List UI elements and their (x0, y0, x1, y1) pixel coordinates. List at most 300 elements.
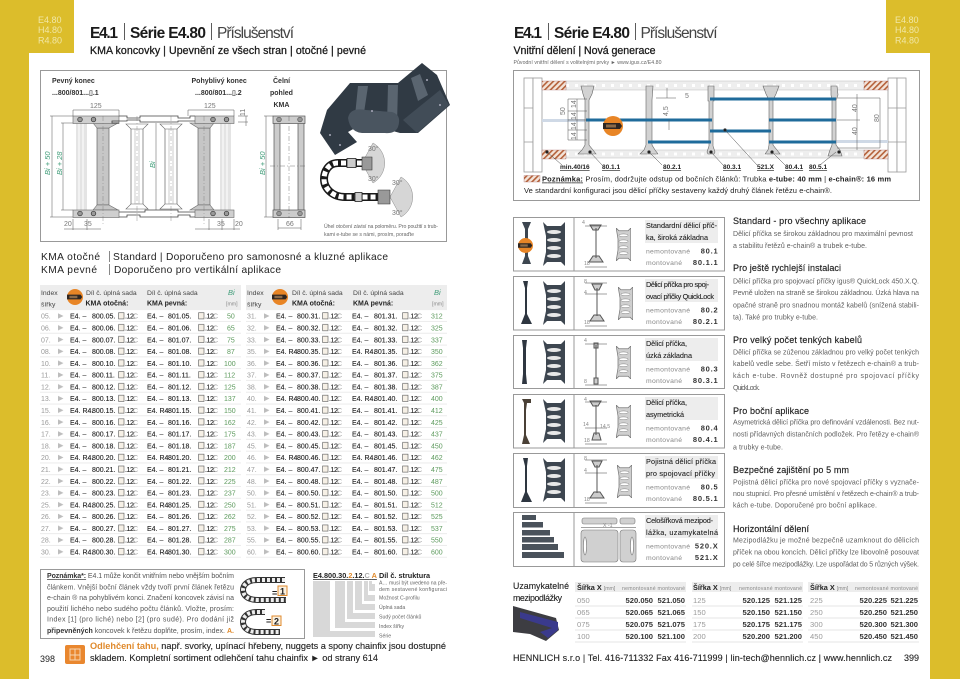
table: shelves 1: 520.100 (626, 632, 653, 641)
right table rows: E4. – (352, 443, 368, 450)
left table rows: C (213, 432, 218, 439)
left table rows: .12. (205, 420, 215, 427)
heading: KMA types: Standard | Doporučeno pro samonosné a kluzné aplikace (113, 252, 388, 263)
right table rows: C (417, 502, 422, 509)
left table rows: 262 (224, 514, 236, 521)
right table header: KMA pevná: (353, 300, 393, 308)
right table rows: E4. – (352, 526, 368, 533)
left table rows: .12. (125, 502, 135, 509)
right table rows: E4. – (352, 491, 368, 498)
left table rows: 175 (224, 432, 236, 439)
table: shelves 2 (692, 582, 803, 642)
right table rows: E4. – (352, 479, 368, 486)
right table rows: .12. (409, 455, 419, 462)
right table rows: .12. (329, 491, 339, 498)
right table rows: 801.40. (374, 396, 397, 403)
panel: 80.3 narrow base separator: 8 (584, 379, 587, 385)
left table rows: .12. (125, 514, 135, 521)
right table rows: 801.60. (374, 550, 397, 556)
left tab series labels: R4.80 (38, 36, 62, 46)
right table rows: C (337, 432, 342, 439)
panel: 80.2 QuickLock separator: Dělicí příčka pro spoj- (646, 280, 710, 289)
table: shelves 2: 520.200 (743, 632, 770, 641)
left table rows: 08. (41, 349, 51, 356)
diagram note (524, 174, 891, 195)
left table rows: 801.23. (168, 491, 191, 498)
right table rows: .12. (329, 337, 339, 344)
left table rows: 187 (224, 443, 236, 450)
right table rows: C (417, 526, 422, 533)
left table rows: 801.08. (168, 349, 191, 356)
left table rows: C (133, 373, 138, 380)
page number right: 399 (904, 653, 919, 663)
right table header: [mm] (432, 302, 444, 308)
left table rows: E4. – (70, 538, 86, 545)
left table rows: .12. (205, 373, 215, 380)
green width labels: Bi (148, 161, 157, 168)
left table rows: E4. – (70, 467, 86, 474)
left table rows: C (133, 349, 138, 356)
panel: 80.4 asymmetric separator: 80.4 (701, 424, 719, 432)
left table header: [mm] (226, 302, 238, 308)
end labels (52, 76, 293, 109)
right table rows: E4. – (276, 443, 292, 450)
left table rows: E4. – (70, 337, 86, 344)
drawing: rotation diagram: 30° (392, 179, 403, 187)
right table rows: 36. (247, 361, 257, 368)
panel: 80.5 locking separator: 80.5.1 (693, 494, 718, 503)
drawing: rotation diagram: 30° (392, 209, 403, 217)
panel: 80.4 asymmetric separator: 14,5 (600, 424, 610, 430)
part number labels: 80.5.1 (809, 164, 827, 171)
part number labels: 80.1.1 (602, 164, 620, 171)
right table rows: 801.50. (374, 491, 397, 498)
left table rows: 65 (227, 326, 235, 332)
right table header: Index (247, 290, 264, 297)
left tab series labels (38, 15, 62, 46)
left table rows: E4. – (70, 373, 86, 380)
panel: 80.5 locking separator: pro spojovací příčky (646, 469, 715, 478)
left table rows: 801.28. (168, 538, 191, 545)
right table rows: E4. – (352, 384, 368, 391)
dimension values: 125 (204, 103, 216, 110)
right table rows: 525 (431, 514, 443, 521)
right table rows: C (337, 467, 342, 474)
left table rows: 200 (224, 455, 236, 462)
dimension values: 14 (571, 132, 578, 140)
panel: 80.1 standard separator: Standardní dělicí příč- (646, 221, 718, 230)
right table header: šířky (247, 302, 262, 308)
structure labels: Možnost C-profilu (379, 596, 420, 602)
left table rows: .12. (125, 455, 135, 462)
right table rows: E4. – (276, 538, 292, 545)
right table rows: 800.41. (297, 408, 320, 415)
right table rows: C (337, 349, 342, 356)
right table rows: 537 (431, 526, 443, 533)
left table rows: E4. – (147, 538, 163, 545)
photo: shelf (513, 606, 559, 641)
right tab series labels: E4.80 (895, 15, 919, 25)
right table rows: 801.32. (374, 326, 397, 332)
dimension values: 35 (84, 221, 92, 228)
note text: Poznámka*: E4.1 může končit vnitřním nebo vnějším bočním (47, 572, 234, 580)
right table rows: 801.35. (374, 349, 397, 356)
right table rows: 801.38. (374, 384, 397, 391)
right table rows: .12. (409, 432, 419, 439)
dimension values: 50 (560, 107, 567, 115)
right table rows: E4. – (352, 373, 368, 380)
left table rows: E4. – (147, 396, 163, 403)
text block: faster installation: ta). Také pro trubky e-tube. (733, 314, 818, 322)
left table rows: .12. (205, 479, 215, 486)
right table header (246, 285, 447, 310)
panel: 80.2 QuickLock separator: montované (646, 319, 682, 326)
panel: 80.3 narrow base separator: 4 (584, 338, 587, 344)
right table rows: E4. – (276, 361, 292, 368)
right table rows: 312 (431, 314, 443, 321)
right table rows: .12. (409, 326, 419, 332)
table: shelves 2: 520.125 (743, 596, 771, 605)
structure labels: Série (379, 634, 391, 640)
heading: KMA types (41, 251, 388, 276)
left table rows: .12. (205, 538, 215, 545)
right table rows: C (337, 491, 342, 498)
left table rows: C (213, 337, 218, 344)
left table rows: 15. (41, 408, 51, 415)
right table rows: 31. (247, 314, 257, 321)
left table rows: .12. (125, 396, 135, 403)
right table rows: 55. (247, 538, 257, 545)
dimension values: 40 (852, 127, 859, 135)
table: shelves 1: 520.050 (626, 596, 653, 605)
right table rows: .12. (409, 502, 419, 509)
panel: note about end links (40, 570, 304, 638)
right table rows: 800.33. (297, 337, 320, 344)
right page title: E4.1 (514, 25, 542, 42)
right table rows: C (337, 455, 342, 462)
text block: faster installation: Pevně uložen na straně se širokou základnou. Úzká hlava na (733, 288, 919, 297)
left table rows: E4. – (70, 479, 86, 486)
left table rows: C (213, 502, 218, 509)
left table rows: C (213, 384, 218, 391)
left table rows: 23. (41, 491, 51, 498)
right table rows: 801.45. (374, 443, 397, 450)
table: shelves 3: 225 (810, 596, 823, 605)
note text: e-chain ® na pohyblivém konci. Značení koncovek závisí na (47, 594, 234, 602)
table: shelves 3: 521.250 (891, 608, 918, 617)
table: shelves 2: 200 (693, 632, 706, 641)
left table rows: .12. (125, 491, 135, 498)
left table rows: .12. (205, 526, 215, 533)
left table rows: E4. – (147, 384, 163, 391)
left table rows: 11. (41, 373, 50, 380)
photo: chain with KMA end (320, 63, 450, 155)
right table rows: .12. (409, 514, 419, 521)
left table rows: .12. (125, 314, 135, 321)
right table rows: .12. (329, 455, 339, 462)
right table rows: .12. (329, 443, 339, 450)
left table rows: E4. – (70, 420, 86, 427)
right tab series labels (895, 15, 919, 46)
structure bars (313, 581, 375, 637)
rotation caption: kami e-tube se s námi, prosím, poraďte (324, 232, 414, 238)
left table rows: C (213, 538, 218, 545)
left table rows: 300 (224, 550, 236, 556)
panel: 520.X interlocking shelf: montované (646, 555, 682, 562)
table: left part numbers (40, 285, 241, 558)
right table rows: 800.42. (297, 420, 320, 427)
note text: připevněných koncovek k řetězu doplňte, prosím, index. A. (47, 628, 234, 635)
left tab series labels: H4.80 (38, 25, 62, 35)
left table rows: .12. (205, 514, 215, 521)
right page title (514, 23, 718, 42)
left table rows: 801.05. (168, 314, 191, 321)
table: shelves 3: 520.450 (860, 632, 887, 641)
right table rows: E4. – (352, 337, 368, 344)
left table rows: 800.05. (92, 314, 115, 321)
panel: 520.X interlocking shelf: Celošířková mezipod- (646, 516, 714, 525)
end brackets (524, 78, 906, 172)
panel: 80.1 standard separator: 4 (582, 220, 585, 226)
right table rows: 33. (247, 337, 257, 344)
left table rows: E4. R4. (70, 455, 93, 462)
left table rows: 801.16. (168, 420, 191, 427)
text block: safe locking: Pojistná dělicí příčka pro nové spojovací příčky s vyznače- (733, 480, 920, 486)
note text: použití lichého nebo sudého počtu článků. Vložte, prosím: (47, 605, 234, 613)
right table rows: E4. – (352, 314, 368, 321)
table: shelves 2: 125 (693, 596, 706, 605)
right table rows: 46. (247, 455, 257, 462)
panel: 80.5 locking separator: 8 (584, 456, 587, 462)
right table rows: 41. (247, 408, 257, 415)
left table rows: 801.26. (168, 514, 191, 521)
left yellow tab (0, 0, 74, 679)
right table rows: .12. (329, 550, 339, 556)
left table rows: .12. (125, 420, 135, 427)
panel: 80.4 asymmetric separator: 80.4.1 (693, 435, 718, 444)
right table rows: 800.60. (297, 550, 320, 556)
table: shelves 2: 521.150 (775, 608, 802, 617)
hatched clearance zones (542, 81, 888, 159)
light tube lines (542, 119, 888, 143)
left table rows: 22. (41, 479, 51, 486)
left table rows: 801.11. (168, 373, 191, 380)
right table rows: E4. – (352, 550, 368, 556)
panel: 520.X interlocking shelf: lážka, uzamykatelná (646, 528, 719, 537)
left table header: Díl č. úplná sada (86, 290, 137, 297)
left table rows: C (133, 538, 138, 545)
right table rows: 48. (247, 479, 257, 486)
right table rows: .12. (409, 361, 419, 368)
right page title: Příslušenství (640, 25, 718, 42)
green width labels: Bi + 50 (43, 151, 52, 175)
right table rows: E4. – (276, 420, 292, 427)
table: shelves 2: 520.175 (743, 620, 771, 629)
right table rows: .12. (329, 514, 339, 521)
panel: 80.4 asymmetric separator: nemontované (646, 426, 690, 432)
left table rows: E4. – (147, 514, 163, 521)
panel: 80.2 QuickLock separator: 4 (584, 290, 587, 296)
right table rows: E4. – (276, 384, 292, 391)
panel: 80.2 QuickLock separator (514, 276, 724, 330)
right table rows: .12. (329, 373, 339, 380)
left table rows: 21. (41, 467, 51, 474)
text block: side applications: a trubky e-tube. (733, 444, 783, 452)
drawing: rotation diagram: 30° (368, 145, 379, 153)
left table rows: 18. (41, 443, 51, 450)
structure labels (379, 580, 447, 640)
right table rows: 801.46. (374, 455, 397, 462)
blue dividers (586, 98, 836, 144)
left table rows: 800.23. (92, 491, 115, 498)
part number labels (560, 164, 827, 171)
table: shelves 1: 065 (577, 608, 590, 617)
left table rows: 800.13. (92, 396, 115, 403)
dimension values: 20 (235, 221, 243, 228)
left table rows: 212 (224, 467, 236, 474)
right yellow tab (886, 0, 960, 679)
right table rows: 37. (247, 373, 257, 380)
left table rows: .12. (125, 408, 135, 415)
left table rows: 800.28. (92, 538, 115, 545)
separators (578, 86, 842, 156)
end labels: pohled (270, 90, 293, 97)
panel: 80.4 asymmetric separator: 18 (584, 438, 590, 444)
dimension lines (50, 110, 301, 230)
panel: 80.5 locking separator: 4 (584, 468, 587, 474)
left table rows: 28. (41, 538, 51, 545)
panel: 80.1 standard separator (514, 218, 724, 271)
panel: 80.4 asymmetric separator: asymetrická (646, 410, 685, 419)
left table rows: E4. R4. (147, 550, 170, 556)
right table rows: .12. (329, 349, 339, 356)
left table rows: 800.11. (92, 373, 115, 380)
text block: many thin cables: Pro velký počet tenkých kabelů (733, 335, 862, 345)
left table rows: 287 (224, 538, 236, 545)
text block: safe locking: Bezpečné zajištění po 5 mm (733, 465, 849, 475)
drawing: KMA front view (270, 116, 307, 218)
panel: 80.2 QuickLock separator: 8 (584, 279, 587, 285)
table: right part numbers (246, 285, 447, 558)
dimension values: 20 (64, 221, 72, 228)
text block: side applications: nosti přídavných distančních podložek. Pro řetězy e-chain® (733, 430, 920, 438)
right table rows: .12. (329, 384, 339, 391)
panel: 520.X interlocking shelf: 521.X (695, 553, 718, 562)
right table rows: E4. – (352, 361, 368, 368)
text block: horizontal division (733, 524, 919, 568)
part leader lines (546, 128, 840, 165)
left table rows: E4. – (147, 326, 163, 332)
left table rows: C (133, 526, 138, 533)
panel: 80.5 locking separator: nemontované (646, 484, 690, 492)
right table rows: .12. (409, 396, 419, 403)
chain index 1: = (272, 588, 277, 598)
right table rows: 801.42. (374, 420, 397, 427)
left table rows: 800.16. (92, 420, 115, 427)
left page title: Příslušenství (217, 25, 295, 42)
right table rows: 51. (247, 502, 257, 509)
dimension values: 14 (571, 112, 578, 120)
text block: standard: Standard - pro všechny aplikace (733, 216, 866, 226)
structure labels: Index šířky (379, 624, 404, 630)
panel: 80.1 standard separator: 80.1.1 (693, 258, 718, 267)
right table rows: .12. (409, 491, 419, 498)
right table rows: 800.46. (297, 455, 320, 462)
right table rows: 462 (431, 455, 443, 462)
right table rows: C (417, 514, 422, 521)
left table rows: 06. (41, 326, 51, 332)
icon: strain relief (65, 645, 85, 664)
right table rows: C (337, 326, 342, 332)
right table rows: 362 (431, 361, 443, 368)
left table rows: 800.18. (92, 443, 115, 450)
rotation caption: Úhel otočení závisí na poloměru. Pro použití s trub- (324, 223, 438, 230)
left table rows: C (213, 455, 218, 462)
right table rows: 801.43. (374, 432, 397, 439)
panel: 80.2 QuickLock separator: 80.2.1 (693, 317, 718, 326)
right table rows: 800.36. (297, 361, 320, 368)
left table header (40, 285, 241, 310)
right table rows: .12. (329, 420, 339, 427)
left table rows: 800.10. (92, 361, 115, 368)
left table rows: C (133, 408, 138, 415)
end labels: KMA (274, 102, 289, 109)
table: shelves 1: 521.075 (658, 620, 686, 629)
chain index 2 (243, 612, 281, 632)
right table rows: .12. (409, 479, 419, 486)
left table rows: 87 (227, 349, 235, 356)
right table rows: E4. – (352, 432, 368, 439)
left table rows: 801.30. (168, 550, 191, 556)
left table rows: 05. (41, 314, 51, 321)
right table rows: .12. (329, 538, 339, 545)
left table rows: E4. – (70, 432, 86, 439)
right table rows: E4. – (276, 502, 292, 509)
right table rows: 437 (431, 432, 443, 439)
right table rows: C (337, 479, 342, 486)
left table rows: E4. – (70, 443, 86, 450)
diagram note: Ve standardní konfiguraci jsou dělicí příčky sestaveny každý druhý článek řetězu e-chain®. (524, 186, 832, 195)
right table rows: C (417, 538, 422, 545)
right table rows: C (337, 361, 342, 368)
table: shelves 2: 521.175 (775, 620, 803, 629)
text block: side applications (733, 406, 920, 452)
right table rows: .12. (329, 326, 339, 332)
dimension values: 5 (685, 93, 689, 100)
left table rows: E4. – (70, 526, 86, 533)
dimension values: 11 (240, 109, 247, 116)
right table rows: E4. – (276, 314, 292, 321)
right table rows: .12. (409, 526, 419, 533)
right table rows: 800.48. (297, 479, 320, 486)
right table rows: 500 (431, 491, 443, 498)
right table rows: 600 (431, 550, 443, 556)
text block: faster installation: opačné straně pro snadnou montáž kabelů (snížená stabili- (733, 302, 920, 310)
right table rows: E4. – (352, 538, 368, 545)
right table rows: 325 (431, 326, 443, 332)
left table rows: 10. (41, 361, 51, 368)
left table rows: C (213, 514, 218, 521)
right table rows: C (417, 396, 422, 403)
left table rows: E4. – (147, 349, 163, 356)
left table rows: E4. – (147, 479, 163, 486)
left table rows: 801.25. (168, 502, 191, 509)
right table rows: 42. (247, 420, 257, 427)
table: shelves 2: 520.150 (743, 608, 770, 617)
left table rows: C (133, 514, 138, 521)
text block: many thin cables: Dělicí příčka se zúženou základnou pro velký počet tenkých (733, 350, 919, 356)
structure code: E4.800.30.2.12.C A (313, 571, 378, 580)
